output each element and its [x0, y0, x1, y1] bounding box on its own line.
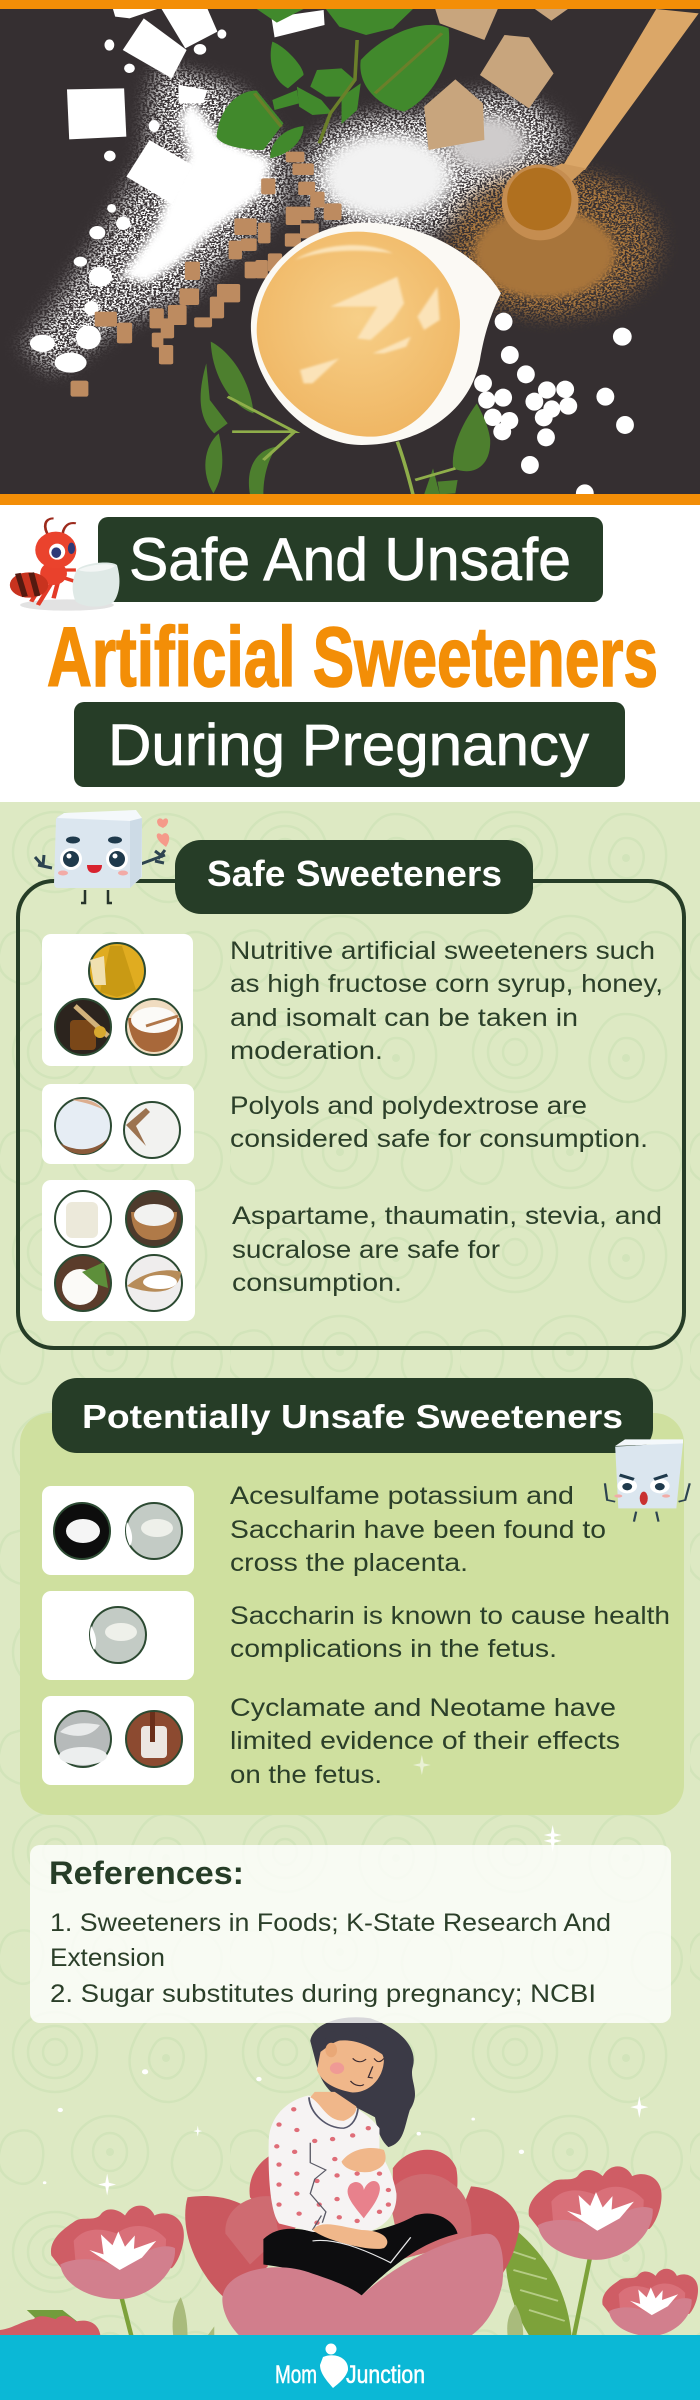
image card 1	[42, 934, 193, 1066]
text 1: Nutritive artificial sweeteners such	[230, 937, 655, 965]
text 3: on the fetus.	[230, 1761, 382, 1789]
text 1: as high fructose corn syrup, honey,	[230, 970, 663, 998]
references heading: References:	[49, 1855, 244, 1891]
hero photo: sweeteners on dark slate	[0, 9, 700, 502]
image card 3	[42, 1696, 194, 1785]
panel outline	[18, 881, 684, 1348]
image card 2	[42, 1084, 194, 1164]
text 1: and isomalt can be taken in	[230, 1004, 578, 1032]
orange divider bar	[0, 494, 700, 505]
text 1: Acesulfame potassium and	[230, 1482, 574, 1510]
references list: 1. Sweeteners in Foods; K-State Research And	[50, 1909, 611, 1937]
top sparkle behind card	[544, 1830, 562, 1852]
heading: potentially unsafe sweeteners: Potentially Unsafe Sweeteners	[82, 1398, 623, 1435]
icon: ant pushing a sugar cube	[10, 518, 119, 611]
top orange bar	[0, 0, 700, 9]
text 1	[230, 937, 663, 1065]
illustration: pregnant woman on flowers	[0, 2017, 698, 2337]
item 1: acesulfame and saccharin	[42, 1482, 606, 1577]
text 2	[230, 1092, 648, 1153]
text 2: Polyols and polydextrose are	[230, 1092, 587, 1120]
item 3: cyclamate and neotame	[42, 1694, 620, 1789]
text 1: cross the placenta.	[230, 1549, 468, 1577]
green patterned background	[0, 802, 700, 2342]
logo text: Mom	[275, 2361, 317, 2389]
text 1: Saccharin have been found to	[230, 1516, 606, 1544]
title line 1: Safe And Unsafe	[129, 526, 571, 593]
heading: potentially unsafe sweeteners	[52, 1378, 653, 1453]
text 3: Aspartame, thaumatin, stevia, and	[232, 1202, 662, 1230]
image card 2	[42, 1591, 194, 1680]
logo text: Junction	[346, 2361, 425, 2389]
image card 3	[42, 1180, 195, 1321]
item 2: polyols	[42, 1084, 648, 1164]
text 2: Saccharin is known to cause health	[230, 1602, 670, 1630]
text 3: consumption.	[232, 1269, 402, 1297]
title banner 2	[74, 702, 625, 787]
text 3	[232, 1202, 662, 1297]
text 2	[230, 1602, 670, 1663]
text 1: moderation.	[230, 1037, 383, 1065]
item 1: nutritive sweeteners	[42, 934, 663, 1066]
title line 3: During Pregnancy	[108, 713, 589, 778]
text 2: considered safe for consumption.	[230, 1125, 648, 1153]
sparkles	[413, 1755, 562, 1845]
text 3: sucralose are safe for	[232, 1236, 500, 1264]
panel: potentially unsafe sweeteners	[20, 1378, 684, 1815]
icon: worried sugar cube mascot	[605, 1439, 690, 1522]
panel: references	[30, 1830, 671, 2023]
text 3: Cyclamate and Neotame have	[230, 1694, 616, 1722]
icon: happy sugar cube mascot	[35, 810, 169, 903]
text 1	[230, 1482, 606, 1577]
panel: safe sweeteners	[18, 840, 684, 1348]
item 3: aspartame group	[42, 1180, 662, 1321]
text 3	[230, 1694, 620, 1789]
title block	[47, 517, 658, 787]
text 2: complications in the fetus.	[230, 1635, 557, 1663]
heading: safe sweeteners	[175, 840, 533, 914]
references card	[30, 1845, 671, 2023]
references list	[50, 1909, 611, 2008]
panel fill	[20, 1413, 684, 1815]
references list: 2. Sugar substitutes during pregnancy; NCBI	[50, 1980, 596, 2008]
footer bar with logo	[0, 2335, 700, 2400]
image card 1	[42, 1486, 194, 1575]
text 3: limited evidence of their effects	[230, 1727, 620, 1755]
heading: safe sweeteners: Safe Sweeteners	[207, 853, 502, 894]
references list: Extension	[50, 1944, 165, 1972]
item 2: saccharin	[42, 1591, 670, 1680]
title banner 1	[98, 517, 603, 602]
logo icon: mother and child	[320, 2344, 348, 2388]
